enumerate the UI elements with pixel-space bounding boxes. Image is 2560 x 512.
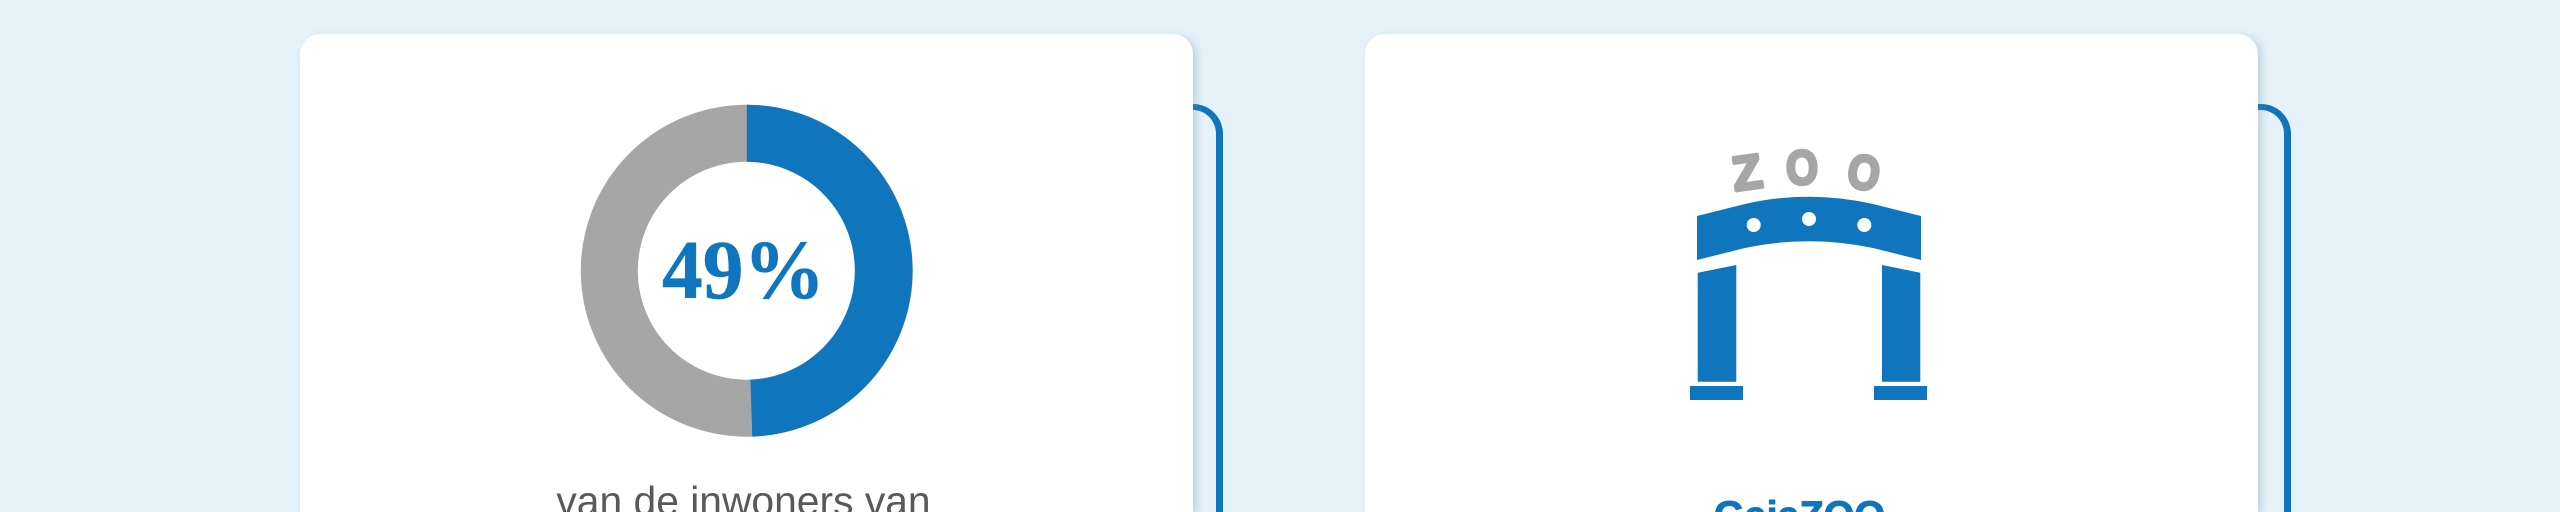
big number: 49%: 49%	[662, 224, 825, 317]
zoo sign letters: O	[1785, 141, 1819, 195]
donut 49 percent segment	[747, 105, 913, 437]
zoo sign letters: O	[1844, 145, 1883, 202]
panel: card 2	[1365, 34, 2258, 512]
donut remainder segment	[609, 133, 884, 408]
arch lights	[1747, 212, 1871, 232]
icon: zoo gate	[1690, 141, 1927, 400]
zoo sign letters: Z	[1729, 145, 1765, 202]
blue outline behind card 1	[1100, 104, 1223, 512]
left column	[1698, 265, 1736, 382]
zoo sign letters	[1729, 141, 1883, 202]
right base	[1874, 386, 1927, 400]
blue outline behind card 2	[2160, 104, 2291, 512]
left base	[1690, 386, 1743, 400]
donut chart: 49 percent	[609, 105, 913, 437]
panel: card 1	[300, 34, 1193, 512]
gate arch	[1697, 197, 1921, 260]
right column	[1882, 265, 1920, 382]
